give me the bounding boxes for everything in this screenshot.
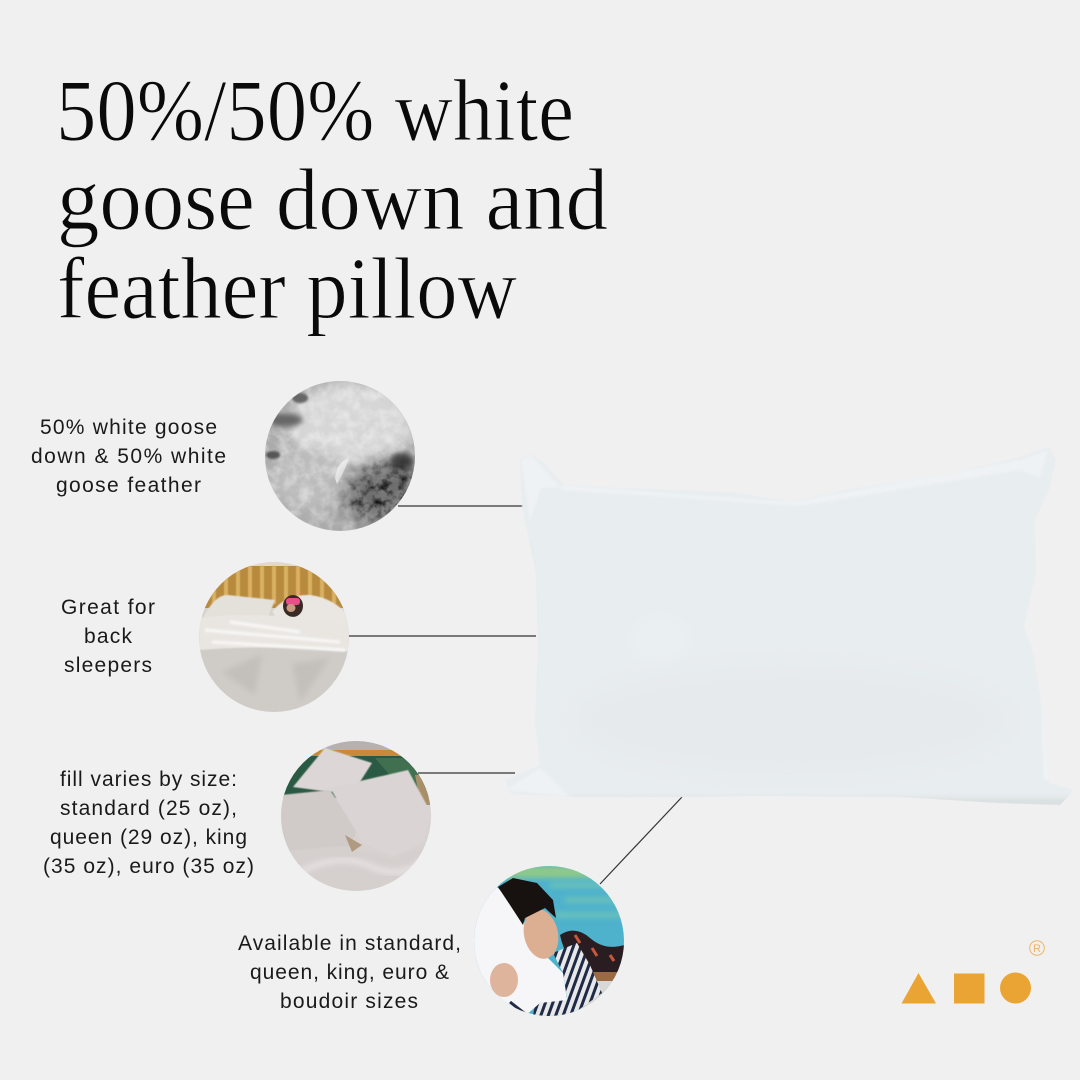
logo bbox=[902, 941, 1044, 1004]
logo: R bbox=[1033, 943, 1041, 955]
text: fill by size: queen (29 oz), king bbox=[50, 826, 247, 849]
text: fill composition bbox=[31, 416, 226, 497]
title bbox=[56, 63, 608, 338]
text: fill composition: 50% white goose bbox=[40, 416, 217, 439]
connector: pillows photo to pillow bbox=[418, 772, 515, 774]
text: fill composition: goose feather bbox=[56, 474, 201, 497]
text: fill by size bbox=[43, 768, 254, 878]
text: fill by size: (35 oz), euro (35 oz) bbox=[43, 855, 254, 878]
pillow image bbox=[505, 447, 1075, 812]
title: goose down and bbox=[57, 152, 608, 249]
text: available sizes: boudoir sizes bbox=[280, 990, 418, 1013]
connector: bed photo to pillow bbox=[349, 635, 536, 637]
photo: woman in bed bbox=[199, 562, 350, 712]
text: available sizes bbox=[238, 932, 461, 1013]
text: fill by size: fill varies by size: bbox=[60, 768, 237, 791]
title: 50%/50% white bbox=[56, 63, 574, 160]
title: feather pillow bbox=[57, 241, 517, 338]
photo: woman hugging pillow bbox=[465, 866, 625, 1016]
text: available sizes: queen, king, euro & bbox=[250, 961, 449, 984]
text: sleeper type: back bbox=[84, 625, 132, 648]
connector: feather photo to pillow bbox=[398, 505, 523, 507]
photo: stacked pillows bbox=[281, 741, 431, 891]
connector: woman photo to pillow bbox=[600, 797, 682, 884]
text: sleeper type: sleepers bbox=[64, 654, 152, 677]
photo: goose down and feathers bbox=[265, 381, 415, 531]
text: sleeper type bbox=[61, 596, 155, 677]
text: fill composition: down & 50% white bbox=[31, 445, 226, 468]
text: sleeper type: Great for bbox=[61, 596, 155, 619]
text: available sizes: Available in standard, bbox=[238, 932, 461, 955]
text: fill by size: standard (25 oz), bbox=[60, 797, 237, 820]
